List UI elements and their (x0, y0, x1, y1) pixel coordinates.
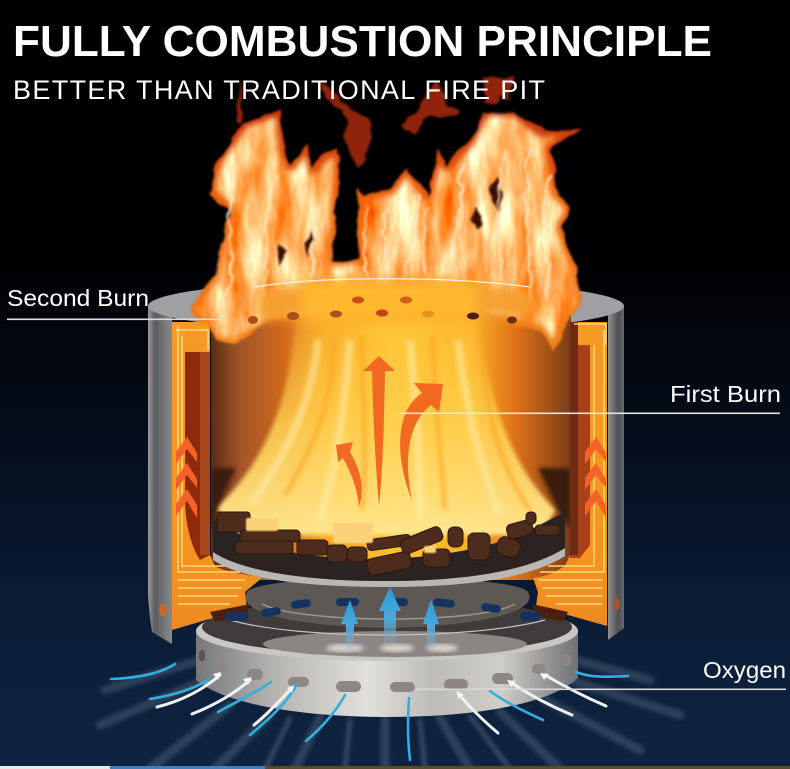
bright streaks (250, 340, 500, 520)
outer shell left (148, 306, 172, 644)
outer shell right (608, 306, 624, 640)
burner base (196, 599, 578, 717)
left curved arrow (336, 442, 362, 507)
bottom image edge strip (0, 766, 790, 769)
pellets tray (213, 512, 565, 581)
side chevrons left (176, 437, 197, 518)
glowing pellets (246, 518, 436, 553)
rim highlight line (255, 279, 530, 287)
blue streaks (111, 664, 628, 760)
dark shadow left bottom (211, 468, 236, 530)
inner chamber fire (211, 300, 571, 580)
oxygen airflow arrows (111, 664, 628, 760)
shell vent holes (159, 598, 620, 616)
air slots (199, 650, 571, 692)
top rim (148, 280, 624, 332)
orange cutaway panel right (532, 322, 607, 626)
center arrow (363, 356, 395, 506)
flame silhouette (190, 110, 580, 352)
rim bright centre (302, 282, 477, 322)
label: first burn: First Burn (670, 381, 781, 407)
subtitle: BETTER THAN TRADITIONAL FIRE PIT (13, 75, 545, 105)
blue up arrows (341, 587, 439, 650)
arrow tips (213, 672, 549, 699)
bell of fire (216, 320, 556, 535)
label: second burn: Second Burn (7, 285, 149, 311)
streaky flame core (190, 110, 580, 352)
lower chamber with blue slots (225, 578, 545, 650)
orange cutaway panel left (172, 322, 263, 630)
first burn arrows (336, 356, 443, 507)
white streaks (157, 675, 606, 733)
flames (190, 78, 580, 352)
right curved arrow (400, 383, 443, 500)
grate plate (213, 548, 565, 587)
label: oxygen: Oxygen (703, 657, 786, 683)
air streaks around burner (100, 660, 680, 769)
title: FULLY COMBUSTION PRINCIPLE (13, 18, 712, 66)
rim flue holes (248, 296, 517, 324)
rim fire band (255, 280, 540, 320)
dark shadow right bottom (538, 468, 571, 530)
side chevrons right (585, 437, 606, 518)
pale flame licks (225, 150, 550, 300)
wood pellets (217, 512, 560, 576)
glow holes inside base (326, 644, 458, 652)
flame gaps (278, 175, 503, 268)
upper wisps (236, 78, 515, 168)
